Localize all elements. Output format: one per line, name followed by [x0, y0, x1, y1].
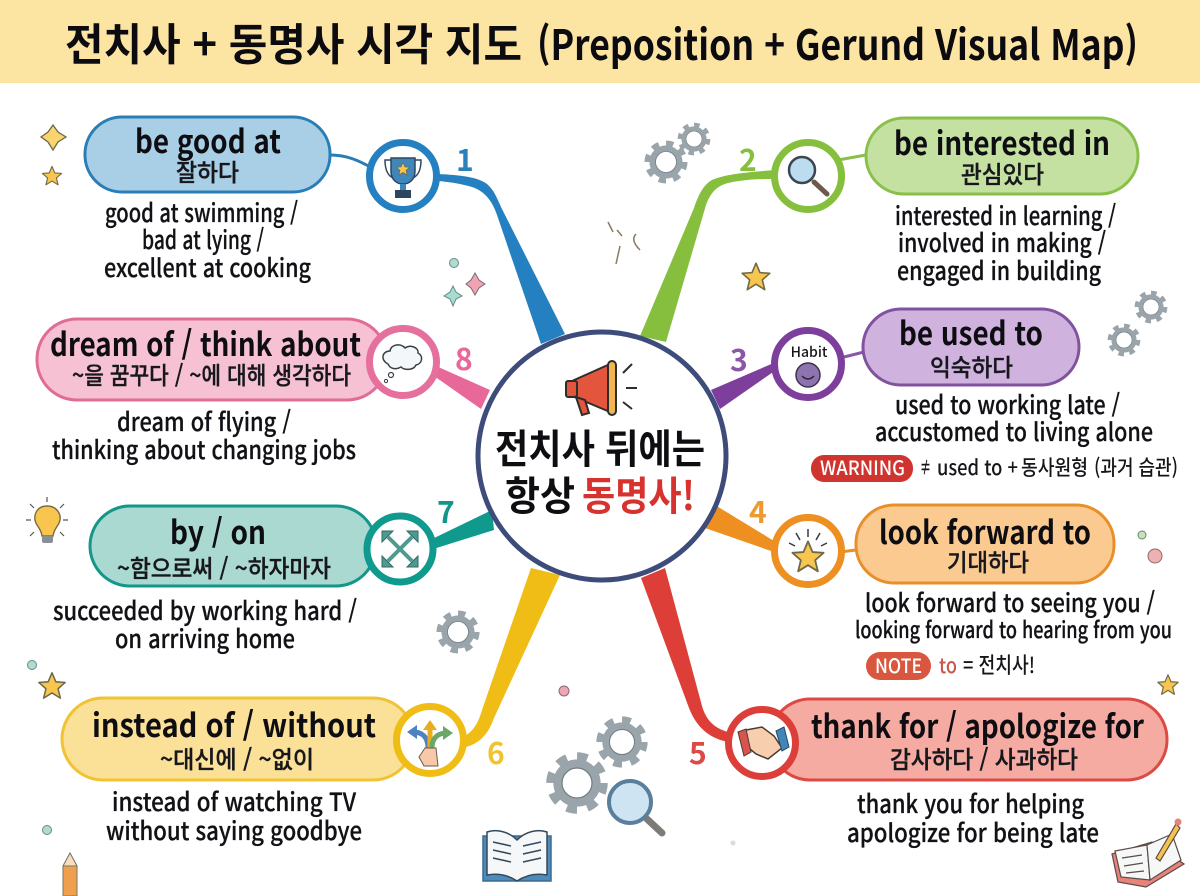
warning note: 동사원형 [1021, 452, 1088, 482]
warning note [811, 452, 1178, 482]
branch: 8 pink [434, 366, 490, 409]
icon: magnifier [774, 142, 842, 210]
icon: handshake [728, 710, 796, 776]
examples: accustomed to living alone [875, 413, 1153, 449]
examples: thank you for helping [857, 785, 1084, 821]
icon: thought cloud [370, 328, 436, 396]
panel: dream of / think about [37, 319, 473, 467]
icon: habit face [774, 330, 842, 398]
pill heading: ~을 꿈꾸다 / ~에 대해 생각하다 [72, 356, 351, 391]
center message [495, 417, 705, 522]
examples [52, 403, 356, 467]
pill heading: be used to [899, 309, 1043, 355]
pill heading: by / on [170, 508, 266, 554]
pill heading: look forward to [879, 508, 1091, 554]
note: NOTE [875, 650, 922, 679]
icon: cross arrows [367, 516, 433, 582]
panel: be used to [730, 309, 1178, 482]
examples: good at swimming / [105, 194, 298, 230]
note [866, 648, 1035, 680]
icon: megaphone [566, 361, 637, 415]
branch: 6 yellow [460, 568, 560, 748]
branch: 1 blue [438, 174, 565, 344]
examples: involved in making / [898, 224, 1106, 260]
number 6: 6 [487, 729, 505, 773]
pill heading [62, 698, 414, 780]
examples: on arriving home [115, 620, 295, 656]
panel: instead of / without [62, 698, 505, 848]
pill heading: 감사하다 / 사과하다 [890, 740, 1078, 775]
decorations: stars and dots [28, 125, 1178, 846]
warning note: used to + [937, 452, 1018, 482]
examples: engaged in building [897, 252, 1101, 288]
examples: interested in learning / [895, 197, 1116, 233]
icon: magnifier large [609, 781, 662, 833]
examples [104, 194, 311, 285]
icon: pencil [63, 853, 77, 896]
pill heading [37, 319, 387, 400]
pill heading [856, 505, 1114, 583]
pill heading [85, 117, 330, 192]
pill heading [866, 118, 1138, 194]
examples: apologize for being late [847, 814, 1099, 850]
pill heading: ~대신에 / ~없이 [160, 740, 314, 775]
pill heading: 익숙하다 [930, 348, 1013, 383]
panel: look forward to [749, 488, 1172, 680]
number 3: 3 [730, 336, 748, 380]
examples: look forward to seeing you / [865, 584, 1155, 620]
icon: open book [483, 831, 551, 881]
examples: succeeded by working hard / [53, 592, 357, 628]
number 8: 8 [455, 335, 473, 379]
examples: dream of flying / [117, 403, 291, 439]
branch: 3 purple [711, 362, 776, 409]
examples [895, 197, 1116, 288]
panel: by / on [53, 488, 455, 656]
examples [847, 785, 1099, 850]
pill heading [770, 699, 1167, 780]
pill heading [863, 309, 1079, 385]
number 2: 2 [739, 136, 757, 180]
pill heading: thank for / apologize for [811, 702, 1144, 748]
branch: 5 red [641, 568, 728, 742]
icon: doodle [608, 222, 640, 264]
icon: shining star [774, 518, 842, 584]
pill heading: 관심있다 [961, 155, 1044, 190]
examples [53, 592, 357, 656]
pill heading: dream of / think about [50, 320, 361, 366]
examples [875, 386, 1153, 449]
pill heading: 기대하다 [947, 543, 1029, 578]
pill heading: ~함으로써 / ~하자마자 [117, 549, 331, 584]
icon: choice arrows [396, 706, 464, 774]
examples: thinking about changing jobs [52, 431, 356, 467]
icon: trophy [370, 142, 436, 210]
number 4: 4 [749, 488, 767, 532]
panel: be good at [85, 117, 474, 285]
examples: without saying goodbye [106, 812, 362, 848]
pill heading [90, 506, 376, 586]
icon: habit face: Habit [791, 342, 828, 362]
note: = 전치사! [963, 648, 1035, 680]
icon: lightbulb [26, 497, 68, 543]
examples [106, 783, 362, 848]
warning note: ≠ [920, 452, 931, 482]
panel: thank for / apologize for [689, 699, 1167, 850]
panel: be interested in [739, 118, 1138, 288]
examples: excellent at cooking [104, 249, 311, 285]
title banner [0, 0, 1200, 83]
number 5: 5 [689, 729, 707, 773]
decorations: gears [440, 125, 1165, 808]
examples: bad at lying / [142, 221, 264, 257]
icon: notebook and pencil [1112, 818, 1184, 887]
branch: 4 orange [705, 505, 774, 552]
warning note: (과거 습관) [1094, 452, 1178, 482]
center message: 동명사! [582, 464, 695, 522]
branch: 2 green [640, 170, 775, 342]
center circle [478, 332, 726, 580]
examples: used to working late / [895, 386, 1120, 422]
examples: instead of watching TV [112, 783, 356, 819]
pill heading: 잘하다 [176, 153, 239, 188]
pill heading: be interested in [894, 119, 1110, 165]
warning note: WARNING [820, 452, 905, 481]
number 7: 7 [437, 488, 455, 532]
pill heading: instead of / without [92, 701, 376, 747]
center message: 전치사 뒤에는 [495, 417, 705, 475]
pill heading: be good at [135, 117, 281, 163]
note: to [939, 650, 957, 680]
examples [855, 584, 1172, 645]
number 1: 1 [456, 136, 474, 180]
title banner: 전치사 + 동명사 시각 지도 [65, 9, 522, 73]
branch: 7 teal [430, 510, 494, 550]
center message: 항상 [505, 464, 575, 522]
